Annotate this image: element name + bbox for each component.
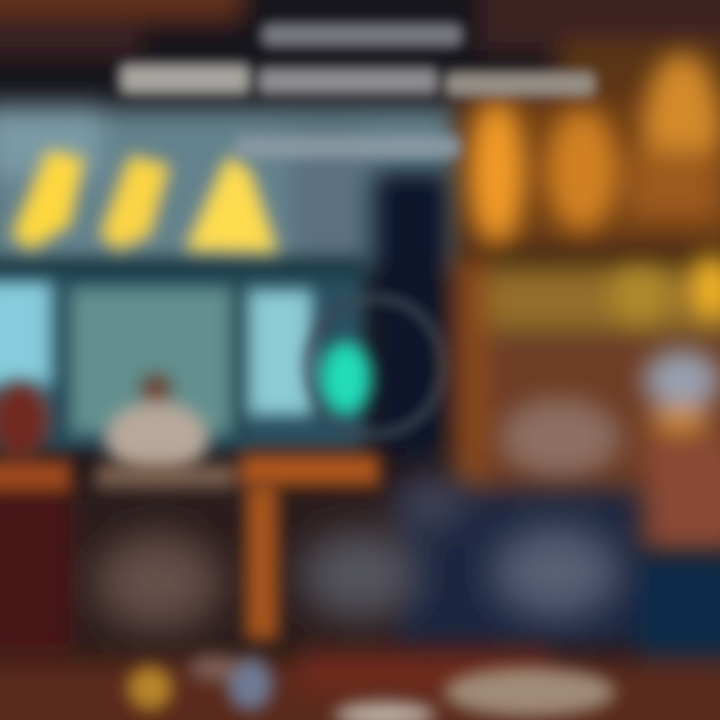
panel: top dark ceiling (0, 0, 720, 105)
icon: ring (307, 298, 443, 434)
icon: tableware (128, 656, 615, 720)
heading: title block (120, 24, 595, 96)
panel: table post (246, 485, 278, 640)
panel: middle table (0, 454, 380, 492)
panel: upper window (0, 105, 460, 270)
panel: right shelf items (500, 350, 720, 550)
icon: yellow window lettering (12, 150, 278, 252)
panel: lower seating (0, 490, 720, 720)
panel: seat cushions (94, 474, 620, 630)
panel: bottom table (0, 650, 720, 720)
panel: window panes (0, 280, 312, 440)
icon: person (0, 374, 209, 474)
panel: lower window band (0, 258, 365, 450)
icon: teal glow (321, 342, 371, 414)
text block: subtitle (235, 136, 460, 158)
panel: right wood wall (452, 90, 720, 555)
icon: hanging lamps (469, 53, 720, 323)
panel: dark column beside window (372, 170, 452, 455)
